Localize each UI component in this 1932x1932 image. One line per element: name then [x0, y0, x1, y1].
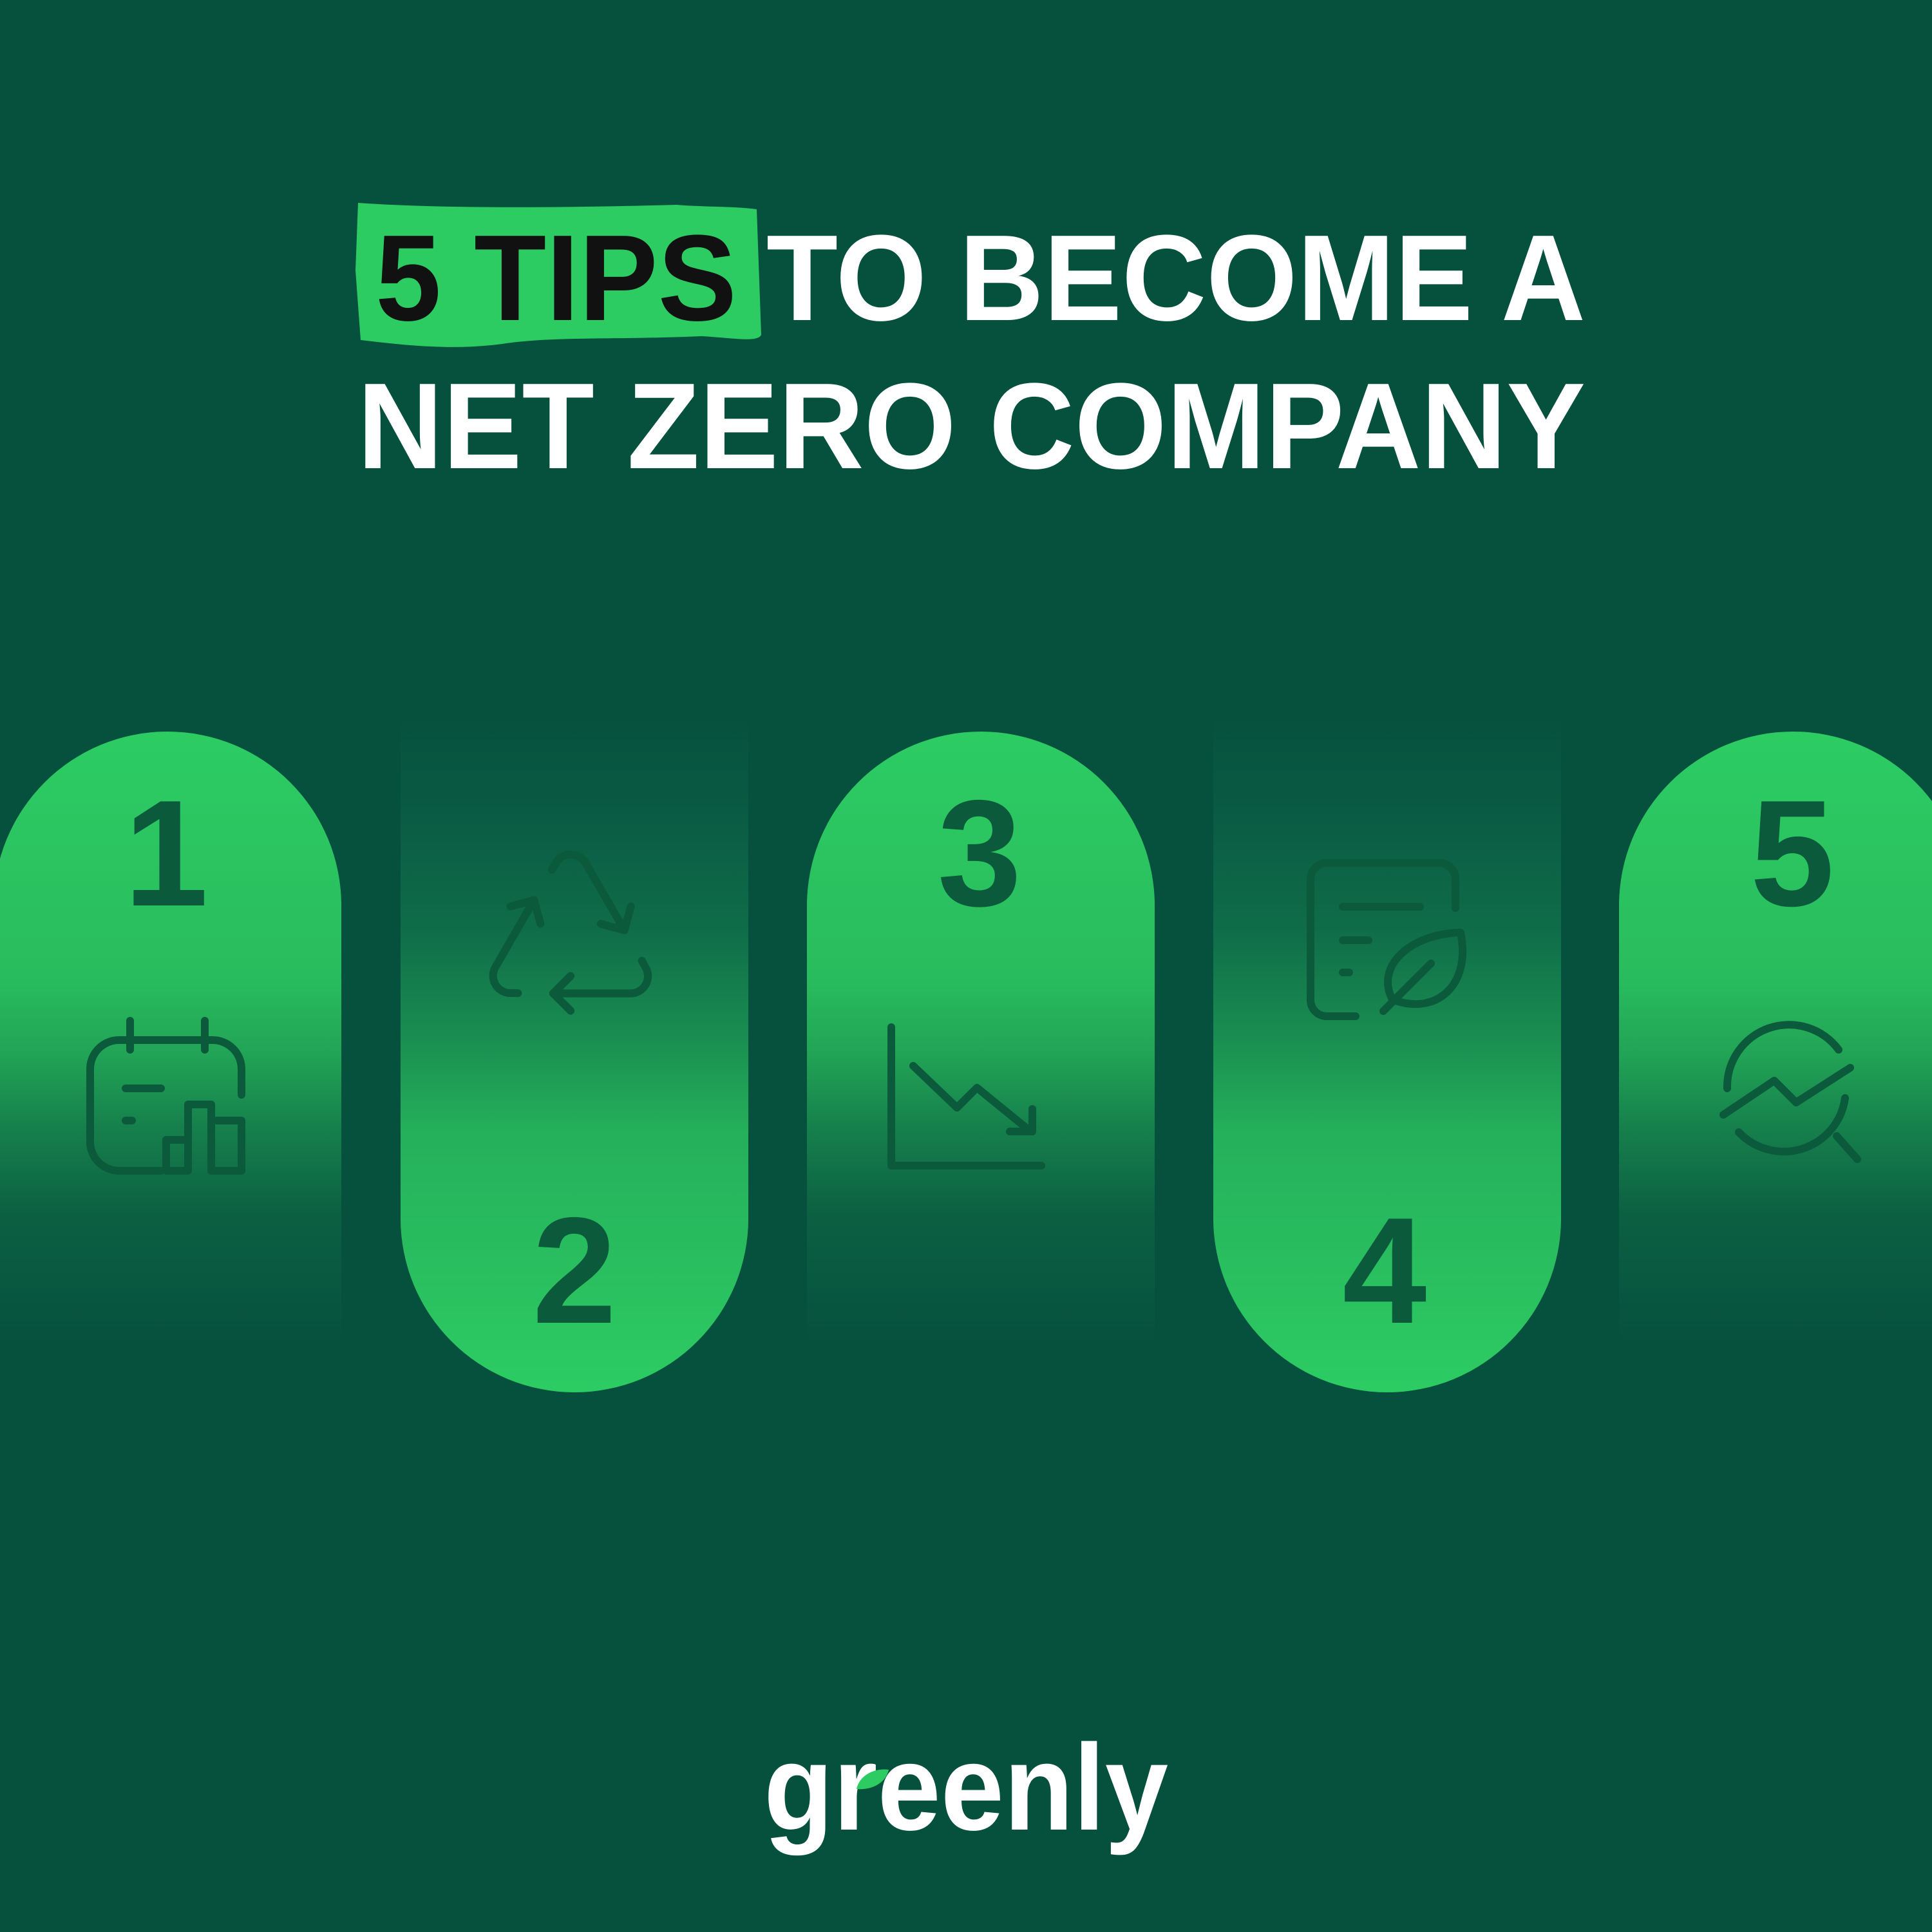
icon: search analytics — [1723, 1025, 1857, 1159]
panel: pill 2 — [401, 708, 748, 1392]
panel: pill 1 — [0, 732, 341, 1350]
title: TO BECOME A — [766, 210, 1586, 346]
panel: pill 3 — [807, 732, 1155, 1350]
title highlight box — [355, 203, 761, 347]
title: 5 TIPS — [375, 210, 737, 346]
icon: leaf — [857, 1769, 889, 1789]
numbers: 2 — [533, 1186, 616, 1355]
numbers — [124, 768, 1834, 1355]
panel: pill 4 — [1213, 708, 1561, 1392]
panel: pill 5 — [1619, 732, 1932, 1350]
icon: calendar chart — [90, 1021, 242, 1171]
numbers: 4 — [1343, 1186, 1426, 1355]
logo: greenly: greenly — [764, 1719, 1168, 1856]
icon: document leaf — [1311, 863, 1463, 1016]
icon: chart down — [891, 1027, 1041, 1166]
numbers: 3 — [938, 768, 1021, 938]
numbers: 5 — [1750, 768, 1834, 938]
numbers: 1 — [124, 768, 208, 938]
title: NET ZERO COMPANY — [357, 358, 1586, 495]
icon: recycle — [493, 855, 648, 1011]
title — [357, 210, 1586, 495]
